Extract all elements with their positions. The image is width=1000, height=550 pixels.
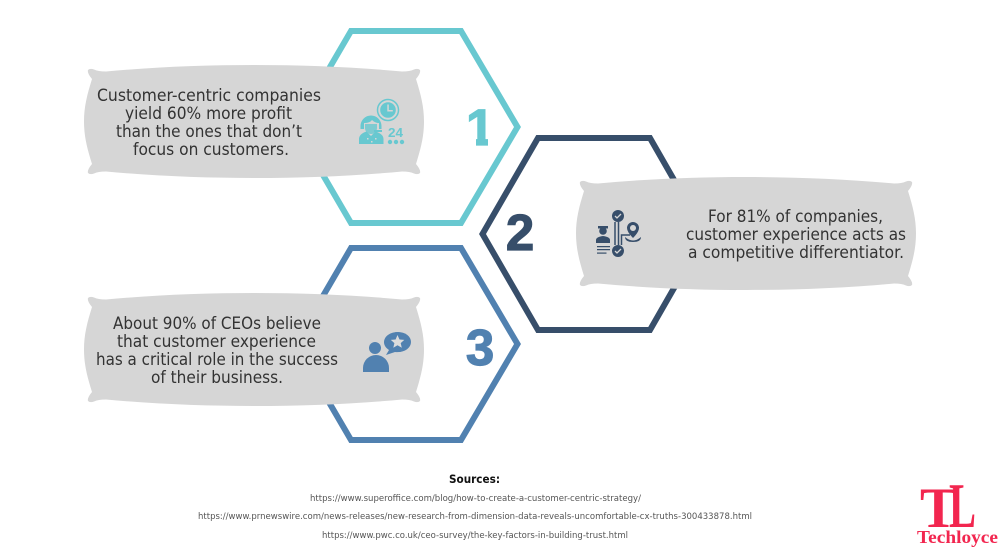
text: statement 3: About 90% of CEOs believe [113, 314, 321, 333]
text: statement 3: of their business. [151, 368, 283, 387]
sources [198, 472, 752, 541]
logo mark TL: T [920, 477, 957, 540]
number 3: 3 [466, 319, 494, 376]
source link 2: https://www.prnewswire.com/news-releases/new-research-from-dimension-data-reveals-uncomfortable-cx-truths-300433878.html [198, 512, 752, 522]
logo mark TL [920, 471, 976, 541]
text: statement 3 [96, 314, 338, 387]
panel: statement 1 [84, 65, 424, 178]
logo: Techloyce [917, 471, 998, 547]
logo wordmark: Techloyce [917, 527, 998, 547]
icon: support agent with clock [359, 100, 404, 144]
panel: statement 3 [84, 293, 424, 406]
number 1: 1 [466, 99, 494, 156]
source link 1: https://www.superoffice.com/blog/how-to-create-a-customer-centric-strategy/ [310, 494, 642, 504]
hexagon 1 outline [295, 31, 518, 223]
text: statement 1 [97, 86, 321, 159]
text: statement 2: a competitive differentiator. [688, 243, 904, 262]
text: statement 3: that customer experience [117, 332, 316, 351]
icon: customer journey [596, 210, 641, 257]
hexagon 3 outline [295, 248, 518, 440]
icon: person with star speech bubble [363, 332, 411, 372]
text: statement 1: than the ones that don’t [116, 122, 302, 141]
text: statement 2 [686, 207, 906, 262]
source link 3: https://www.pwc.co.uk/ceo-survey/the-key-factors-in-building-trust.html [322, 531, 628, 541]
icon: support agent with clock: 24 [388, 125, 404, 140]
text: statement 1: yield 60% more profit [125, 104, 292, 123]
text: statement 1: Customer-centric companies [97, 86, 321, 105]
panel: statement 2 [576, 177, 916, 290]
text: statement 3: has a critical role in the success [96, 350, 338, 369]
logo mark TL: L [949, 471, 976, 541]
text: statement 1: focus on customers. [133, 140, 289, 159]
sources heading: Sources: [449, 472, 500, 486]
text: statement 2: customer experience acts as [686, 225, 906, 244]
text: statement 2: For 81% of companies, [708, 207, 883, 226]
number 2: 2 [506, 204, 534, 261]
hexagon 2 outline [482, 138, 705, 330]
